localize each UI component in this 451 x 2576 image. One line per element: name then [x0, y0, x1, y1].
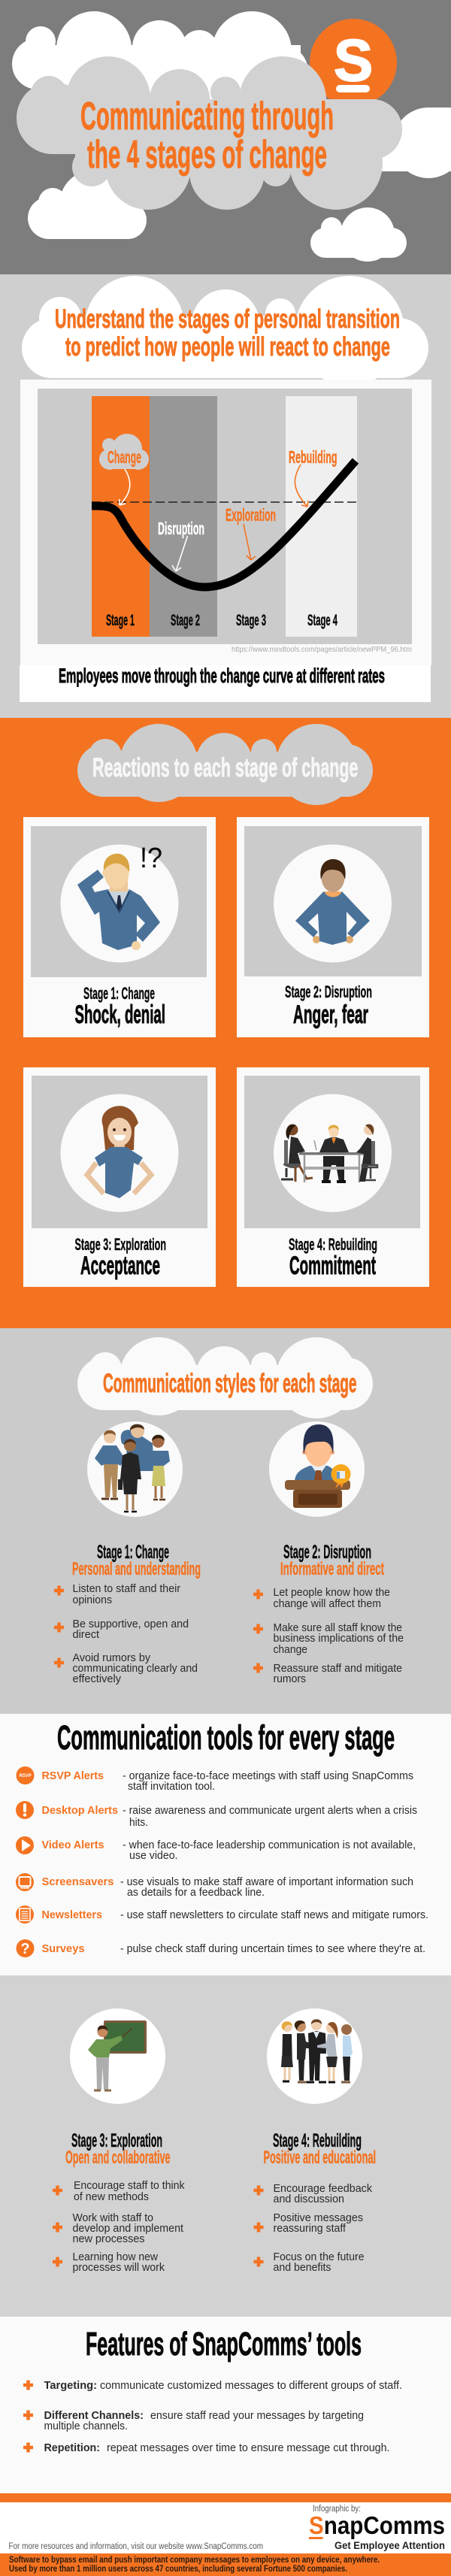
- stage label: Stage 2: Disruption: [285, 982, 372, 1001]
- illustration: five colleagues: [281, 2019, 353, 2082]
- bullet list: [254, 2183, 373, 2274]
- bullet list: Work with staff to: [72, 2212, 153, 2224]
- bullet list: change: [274, 1644, 307, 1656]
- cloud: styles heading backing: [77, 1337, 373, 1418]
- cloud: reactions heading backing: [77, 724, 373, 805]
- bullet list: Avoid rumors by: [72, 1652, 151, 1664]
- feature: targeting: communicate customized messages to different groups of staff.: [100, 2380, 402, 2392]
- tagline: Get Employee Attention: [334, 2540, 445, 2551]
- bullet list: direct: [72, 1629, 99, 1641]
- tool: screensavers: - use visuals to make staff aware of important information such: [120, 1876, 413, 1888]
- stage labels: Stage 3: [236, 612, 266, 629]
- illustration: teacher at blackboard: [88, 2021, 147, 2090]
- column: stage 2: [253, 1421, 404, 1685]
- bullet list: rumors: [274, 1673, 306, 1685]
- label: rebuilding: Rebuilding: [289, 447, 337, 467]
- bullet list: Make sure all staff know the: [274, 1622, 402, 1634]
- tool: screensavers: [16, 1873, 413, 1899]
- column: stage 1: Stage 1: Change: [97, 1542, 169, 1563]
- tool: RSVP alerts: RSVP: [19, 1774, 32, 1778]
- bullet list: of new methods: [74, 2191, 149, 2203]
- cloud: section heading backing: [22, 276, 428, 386]
- feature: targeting: Targeting:: [44, 2380, 97, 2392]
- tool: video alerts: use video.: [129, 1850, 177, 1862]
- bullet list: opinions: [72, 1594, 112, 1606]
- stage heading: Stage 4: Rebuilding: [273, 2130, 362, 2151]
- tool: video alerts: - when face-to-face leadership communication is not available,: [123, 1839, 416, 1851]
- panel: stages of personal transition: [0, 274, 451, 718]
- bullet list: Let people know how the: [274, 1587, 390, 1599]
- panel: change curve card: [20, 380, 431, 702]
- panel: communication styles stage 1 and 2: [0, 1328, 451, 1714]
- bullet list: develop and implement: [72, 2223, 183, 2235]
- column: stage 4: [254, 2008, 376, 2274]
- tool: newsletters: Newsletters: [42, 1909, 102, 1921]
- bullet list: and discussion: [274, 2193, 344, 2205]
- card: stage 1: [23, 817, 216, 1037]
- illustration: speaker at podium: [285, 1424, 350, 1508]
- feature: different channels: [23, 2410, 364, 2432]
- panel: footer: [0, 2493, 451, 2576]
- stage label: Stage 1: Change: [83, 984, 155, 1003]
- column: stage 1: [54, 1421, 201, 1685]
- panel: reactions: [0, 718, 451, 1328]
- stage labels: [106, 612, 337, 629]
- bullet list: Learning how new: [72, 2251, 158, 2263]
- logo: orange S badge: [310, 19, 397, 106]
- bullet list: and benefits: [274, 2262, 331, 2274]
- illustration: smiling woman: [87, 1106, 151, 1198]
- tool: RSVP alerts: staff invitation tool.: [128, 1781, 215, 1793]
- card: stage 4: [237, 1067, 429, 1287]
- source url: https://www.mindtools.com/pages/article/newPPM_96.htm: [232, 646, 412, 654]
- stage labels: Stage 2: [171, 612, 200, 629]
- panel: communication tools: [0, 1714, 451, 1975]
- heading: [55, 304, 400, 362]
- tool: desktop alerts: [16, 1801, 417, 1829]
- reaction: Anger, fear: [293, 1000, 368, 1029]
- label: exploration: Exploration: [226, 505, 276, 525]
- tool: video alerts: [16, 1836, 416, 1862]
- style: Personal and understanding: [72, 1559, 201, 1579]
- bullet list: new processes: [72, 2233, 144, 2245]
- stage heading: Stage 3: Exploration: [71, 2130, 162, 2151]
- tool: desktop alerts: Desktop Alerts: [42, 1804, 118, 1817]
- arrow: disruption: [172, 536, 188, 571]
- illustration: confused man: [77, 854, 160, 950]
- logo: orange S badge: S: [334, 27, 373, 93]
- bullet list: Positive messages: [274, 2212, 363, 2224]
- feature: different channels: multiple channels.: [44, 2420, 128, 2432]
- bullet list: Reassure staff and mitigate: [274, 1663, 402, 1675]
- arrow: change: [120, 469, 130, 505]
- bullet list: change will affect them: [274, 1598, 381, 1610]
- text: question marks: !?: [140, 843, 162, 874]
- bullet list: Encourage staff to think: [74, 2180, 185, 2192]
- bullet list: communicating clearly and: [72, 1663, 198, 1675]
- tool: newsletters: [16, 1906, 428, 1924]
- reaction: Acceptance: [80, 1252, 160, 1280]
- website line: For more resources and information, visit our website www.SnapComms.com: [9, 2542, 263, 2551]
- stage labels: Stage 1: [106, 612, 135, 629]
- feature: repetition: repeat messages over time to ensure message cut through.: [107, 2442, 389, 2454]
- company blurb: [9, 2556, 380, 2574]
- reaction: Commitment: [289, 1252, 376, 1280]
- tool: screensavers: Screensavers: [42, 1875, 114, 1888]
- stage heading: Stage 2: Disruption: [283, 1542, 371, 1563]
- stage label: Stage 3: Exploration: [75, 1235, 166, 1254]
- tool: RSVP alerts: RSVP Alerts: [42, 1769, 104, 1782]
- cloud: lower left white: [28, 170, 147, 239]
- company blurb: Used by more than 1 million users across 47 countries, including several Fortune 500 companies.: [9, 2565, 347, 2574]
- illustration: four staff: [95, 1424, 170, 1512]
- bullet list: effectively: [72, 1673, 122, 1685]
- cloud: top white: [12, 11, 308, 105]
- arrow: exploration: [244, 524, 256, 560]
- bullet list: [54, 1583, 198, 1685]
- bullet list: [253, 1587, 404, 1685]
- feature: different channels: ensure staff read your messages by targeting: [150, 2410, 364, 2422]
- panel: title header: [0, 0, 451, 274]
- style: Open and collaborative: [65, 2148, 170, 2168]
- tool: screensavers: as details for a feedback line.: [127, 1887, 265, 1899]
- bullet list: [53, 2180, 185, 2274]
- tool: surveys: [17, 1939, 425, 1957]
- bullet list: processes will work: [72, 2262, 165, 2274]
- tool: surveys: Surveys: [42, 1942, 84, 1955]
- company blurb: Software to bypass email and push important company messages to employees on any device, anywhere.: [9, 2556, 380, 2565]
- bullet list: Be supportive, open and: [72, 1618, 189, 1630]
- feature: different channels: Different Channels:: [44, 2410, 144, 2422]
- tool: surveys: ?: [20, 1941, 30, 1957]
- panel: communication styles stage 3 and 4: [0, 1975, 451, 2317]
- tool: newsletters: - use staff newsletters to circulate staff news and mitigate rumors.: [120, 1909, 428, 1921]
- bullet list: Encourage feedback: [274, 2183, 373, 2195]
- tool: video alerts: Video Alerts: [42, 1839, 104, 1851]
- panel: features of SnapComms tools: [0, 2317, 451, 2493]
- tool: RSVP alerts: [17, 1766, 413, 1793]
- tool: surveys: - pulse check staff during uncertain times to see where they're at.: [120, 1943, 425, 1955]
- title: [80, 95, 334, 177]
- bullet list: business implications of the: [274, 1633, 404, 1645]
- stage label: Stage 4: Rebuilding: [289, 1235, 377, 1254]
- arrow: rebuilding: [295, 465, 308, 507]
- bullet list: reassuring staff: [274, 2223, 347, 2235]
- cloud: title backing: [17, 56, 402, 210]
- cloud: change label: [99, 434, 149, 470]
- cloud: lower right white: [310, 207, 407, 262]
- cloud: right white: [376, 107, 451, 178]
- illustration: angry man: [295, 859, 370, 945]
- feature: repetition: Repetition:: [44, 2442, 100, 2454]
- cloud: change label: Change: [107, 447, 141, 467]
- chart: change curve: [38, 389, 412, 644]
- bullet list: Listen to staff and their: [72, 1583, 180, 1595]
- column: stage 3: [53, 2008, 185, 2274]
- label: disruption: Disruption: [158, 519, 204, 538]
- illustration: meeting at a table: [281, 1124, 377, 1182]
- card: stage 3: [23, 1067, 216, 1287]
- tool: desktop alerts: hits.: [129, 1817, 148, 1829]
- tool: desktop alerts: - raise awareness and communicate urgent alerts when a crisis: [123, 1805, 417, 1817]
- bullet list: Focus on the future: [274, 2251, 364, 2263]
- card: stage 2: [237, 817, 429, 1037]
- credit label: Infographic by:: [313, 2505, 361, 2514]
- tool: RSVP alerts: - organize face-to-face meetings with staff using SnapComms: [123, 1770, 413, 1782]
- reaction: Shock, denial: [75, 1000, 165, 1029]
- stage labels: Stage 4: [307, 612, 337, 629]
